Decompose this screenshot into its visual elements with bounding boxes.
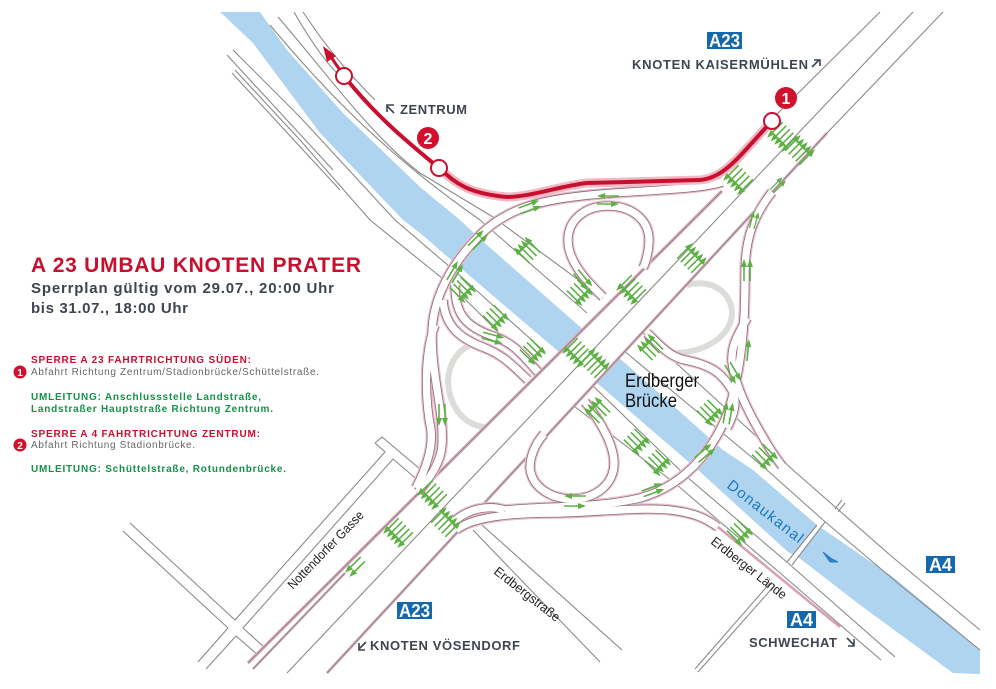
label: Donaukanal: Donaukanal bbox=[724, 477, 807, 547]
badge 2 in legend: 2 bbox=[17, 441, 23, 452]
sign: A4 east: A4 bbox=[929, 555, 952, 575]
text block: detour 1 bbox=[31, 392, 273, 415]
text block: closure 2: SPERRE A 4 FAHRTRICHTUNG ZENTRUM: bbox=[31, 429, 260, 440]
badge 2 in legend bbox=[14, 438, 26, 452]
sign: A4 south: A4 bbox=[790, 610, 813, 630]
badge 1 in legend bbox=[14, 366, 26, 379]
bridge over the canal bbox=[787, 500, 845, 565]
closure marker circles bbox=[336, 68, 780, 176]
sign: A23 north: A23 bbox=[709, 31, 740, 51]
badge 2 on map: 2 bbox=[424, 131, 433, 148]
subtitle: validity period: Sperrplan gültig vom 29.07., 20:00 Uhr bbox=[31, 280, 334, 297]
badge 2 on map bbox=[417, 127, 439, 149]
badge 1 on map: 1 bbox=[782, 91, 791, 108]
label: Knoten Kaisermühlen: KNOTEN KAISERMÜHLEN bbox=[632, 57, 808, 72]
text block: detour 2: UMLEITUNG: Schüttelstraße, Rotundenbrücke. bbox=[31, 464, 286, 475]
subtitle: validity period bbox=[31, 280, 334, 317]
label: Erdberger Brücke: Erdberger bbox=[625, 371, 700, 392]
text block: closure 1: Abfahrt Richtung Zentrum/Stadionbrücke/Schüttelstraße. bbox=[31, 367, 319, 378]
Erdberger Lände pink edge bbox=[718, 527, 840, 627]
label: Knoten Vösendorf: KNOTEN VÖSENDORF bbox=[370, 638, 520, 653]
text block: detour 1: UMLEITUNG: Anschlussstelle Landstraße, bbox=[31, 392, 261, 403]
A23 motorway deck bbox=[248, 12, 943, 673]
label: Erdberger Brücke bbox=[625, 371, 700, 412]
text block: closure 2: Abfahrt Richtung Stadionbrücke. bbox=[31, 440, 195, 451]
closure route: red line bbox=[323, 46, 772, 197]
badge 1 on map bbox=[775, 87, 797, 109]
sign: A23 south: A23 bbox=[399, 601, 430, 621]
title: A 23 UMBAU KNOTEN PRATER bbox=[31, 254, 361, 277]
label: Erdbergstraße: Erdbergstraße bbox=[491, 564, 563, 625]
text block: closure 1 bbox=[14, 353, 319, 379]
label: Erdberger Brücke: Brücke bbox=[625, 391, 677, 412]
label: Zentrum: ZENTRUM bbox=[400, 102, 467, 117]
label: Erdberger Lände: Erdberger Lände bbox=[708, 534, 790, 602]
river flow arrow bbox=[823, 552, 838, 562]
green traffic arrows bbox=[343, 120, 817, 579]
grey closed loop ramps bbox=[448, 283, 732, 427]
label: Schwechat: SCHWECHAT bbox=[749, 635, 837, 650]
interchange ramps bbox=[416, 182, 782, 530]
text block: closure 1: SPERRE A 23 FAHRTRICHTUNG SÜDEN: bbox=[31, 353, 251, 366]
text block: detour 1: Landstraßer Hauptstraße Richtung Zentrum. bbox=[31, 404, 273, 415]
subtitle: validity period: bis 31.07., 18:00 Uhr bbox=[31, 300, 188, 317]
river: Donaukanal bbox=[220, 12, 980, 674]
label: Nottendorfer Gasse: Nottendorfer Gasse bbox=[284, 508, 367, 592]
text block: closure 2 bbox=[14, 429, 260, 452]
badge 1 in legend: 1 bbox=[17, 368, 23, 379]
